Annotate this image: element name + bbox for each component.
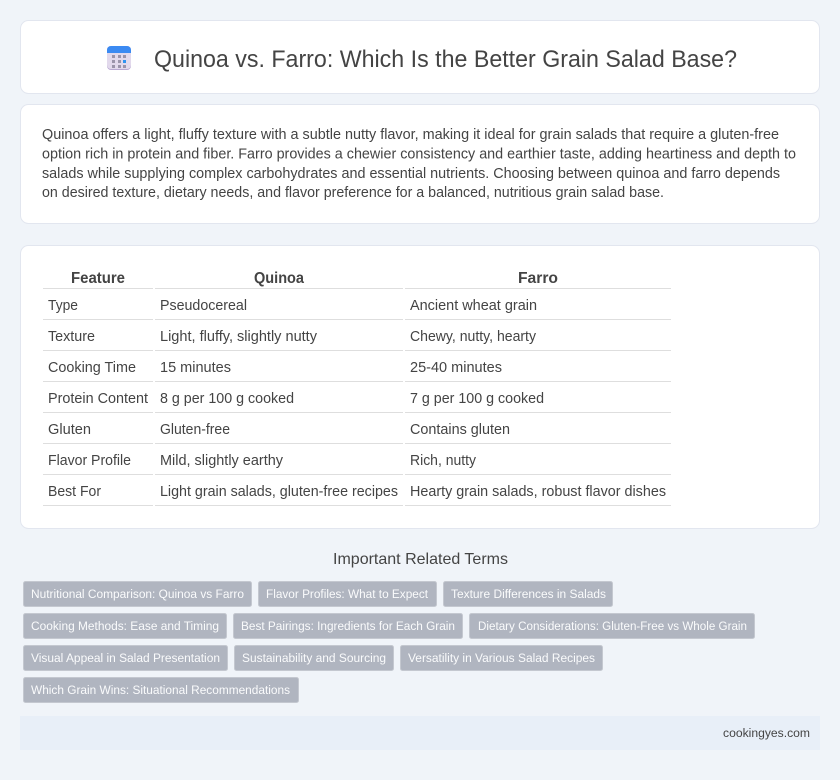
row: flavor profile: Mild, slightly earthy	[160, 453, 284, 469]
tag	[258, 582, 436, 606]
tag: Flavor Profiles: What to Expect	[266, 587, 429, 601]
panel: comparison table	[20, 246, 820, 528]
text block: description: option rich in protein and fiber. Farro provides a chewier consistency and earthier taste, adding heartiness and depth to	[42, 146, 796, 162]
text block: description: Quinoa offers a light, fluffy texture with a subtle nutty flavor, making it ideal for grain salads that require a gluten-free	[42, 127, 779, 143]
row: gluten	[48, 422, 510, 438]
row: cooking time: 25-40 minutes	[410, 360, 502, 376]
row: texture: Light, fluffy, slightly nutty	[160, 329, 318, 345]
row: type	[48, 298, 537, 314]
table header: Farro	[518, 270, 558, 287]
heading: related terms: Important Related Terms	[333, 551, 508, 568]
tag: Cooking Methods: Ease and Timing	[31, 619, 219, 633]
row: cooking time: Cooking Time	[48, 360, 136, 376]
row: flavor profile	[48, 453, 477, 469]
tag: Versatility in Various Salad Recipes	[408, 651, 595, 665]
row: gluten: Contains gluten	[410, 422, 510, 438]
tag: Sustainability and Sourcing	[242, 651, 386, 665]
text block: description: on desired texture, dietary needs, and flavor preference for a balanced, nutritious grain salad base.	[42, 185, 664, 201]
tag: Which Grain Wins: Situational Recommendations	[31, 683, 290, 697]
row: gluten: Gluten-free	[160, 422, 230, 438]
text block: description	[42, 127, 796, 201]
panel: description	[20, 104, 820, 224]
row: best for: Best For	[48, 484, 101, 500]
panel: header	[20, 20, 820, 94]
table header: Feature	[71, 270, 125, 287]
row: flavor profile: Rich, nutty	[410, 453, 477, 469]
panel: related term tags	[24, 582, 754, 702]
footer	[20, 716, 820, 750]
tag	[470, 614, 754, 638]
row: texture	[48, 329, 537, 345]
row: type: Ancient wheat grain	[410, 298, 537, 314]
row: gluten: Gluten	[48, 422, 91, 438]
row: texture: Texture	[48, 329, 95, 345]
footer source text: cookingyes.com	[723, 726, 810, 740]
title: Quinoa vs. Farro: Which Is the Better Grain Salad Base?	[154, 46, 737, 73]
tag: Texture Differences in Salads	[451, 587, 606, 601]
tag	[24, 678, 298, 702]
row: cooking time	[48, 360, 502, 376]
tag	[24, 614, 226, 638]
row: type: Type	[48, 298, 78, 314]
icon: calendar	[107, 46, 131, 70]
tag	[234, 614, 462, 638]
tag	[444, 582, 612, 606]
tag	[24, 582, 252, 606]
row: protein content: 7 g per 100 g cooked	[410, 391, 544, 407]
row: protein content: 8 g per 100 g cooked	[160, 391, 294, 407]
row: best for: Light grain salads, gluten-free recipes	[160, 484, 398, 500]
tag: Visual Appeal in Salad Presentation	[31, 651, 220, 665]
tag: Best Pairings: Ingredients for Each Grain	[241, 619, 455, 633]
tag	[400, 646, 602, 670]
tag: Nutritional Comparison: Quinoa vs Farro	[31, 587, 244, 601]
tag: Dietary Considerations: Gluten-Free vs Whole Grain	[478, 619, 747, 633]
table header	[71, 270, 558, 287]
tag	[24, 646, 228, 670]
table header: Quinoa	[254, 270, 304, 287]
row: flavor profile: Flavor Profile	[48, 453, 131, 469]
row: best for	[48, 484, 666, 500]
row: type: Pseudocereal	[160, 298, 247, 314]
row: texture: Chewy, nutty, hearty	[410, 329, 537, 345]
row: cooking time: 15 minutes	[160, 360, 231, 376]
row: protein content	[48, 391, 544, 407]
row: best for: Hearty grain salads, robust flavor dishes	[410, 484, 666, 500]
row: protein content: Protein Content	[48, 391, 148, 407]
text block: description: salads while supplying complex carbohydrates and essential nutrients. Choosing between quinoa and farro depends	[42, 166, 780, 182]
tag	[234, 646, 394, 670]
